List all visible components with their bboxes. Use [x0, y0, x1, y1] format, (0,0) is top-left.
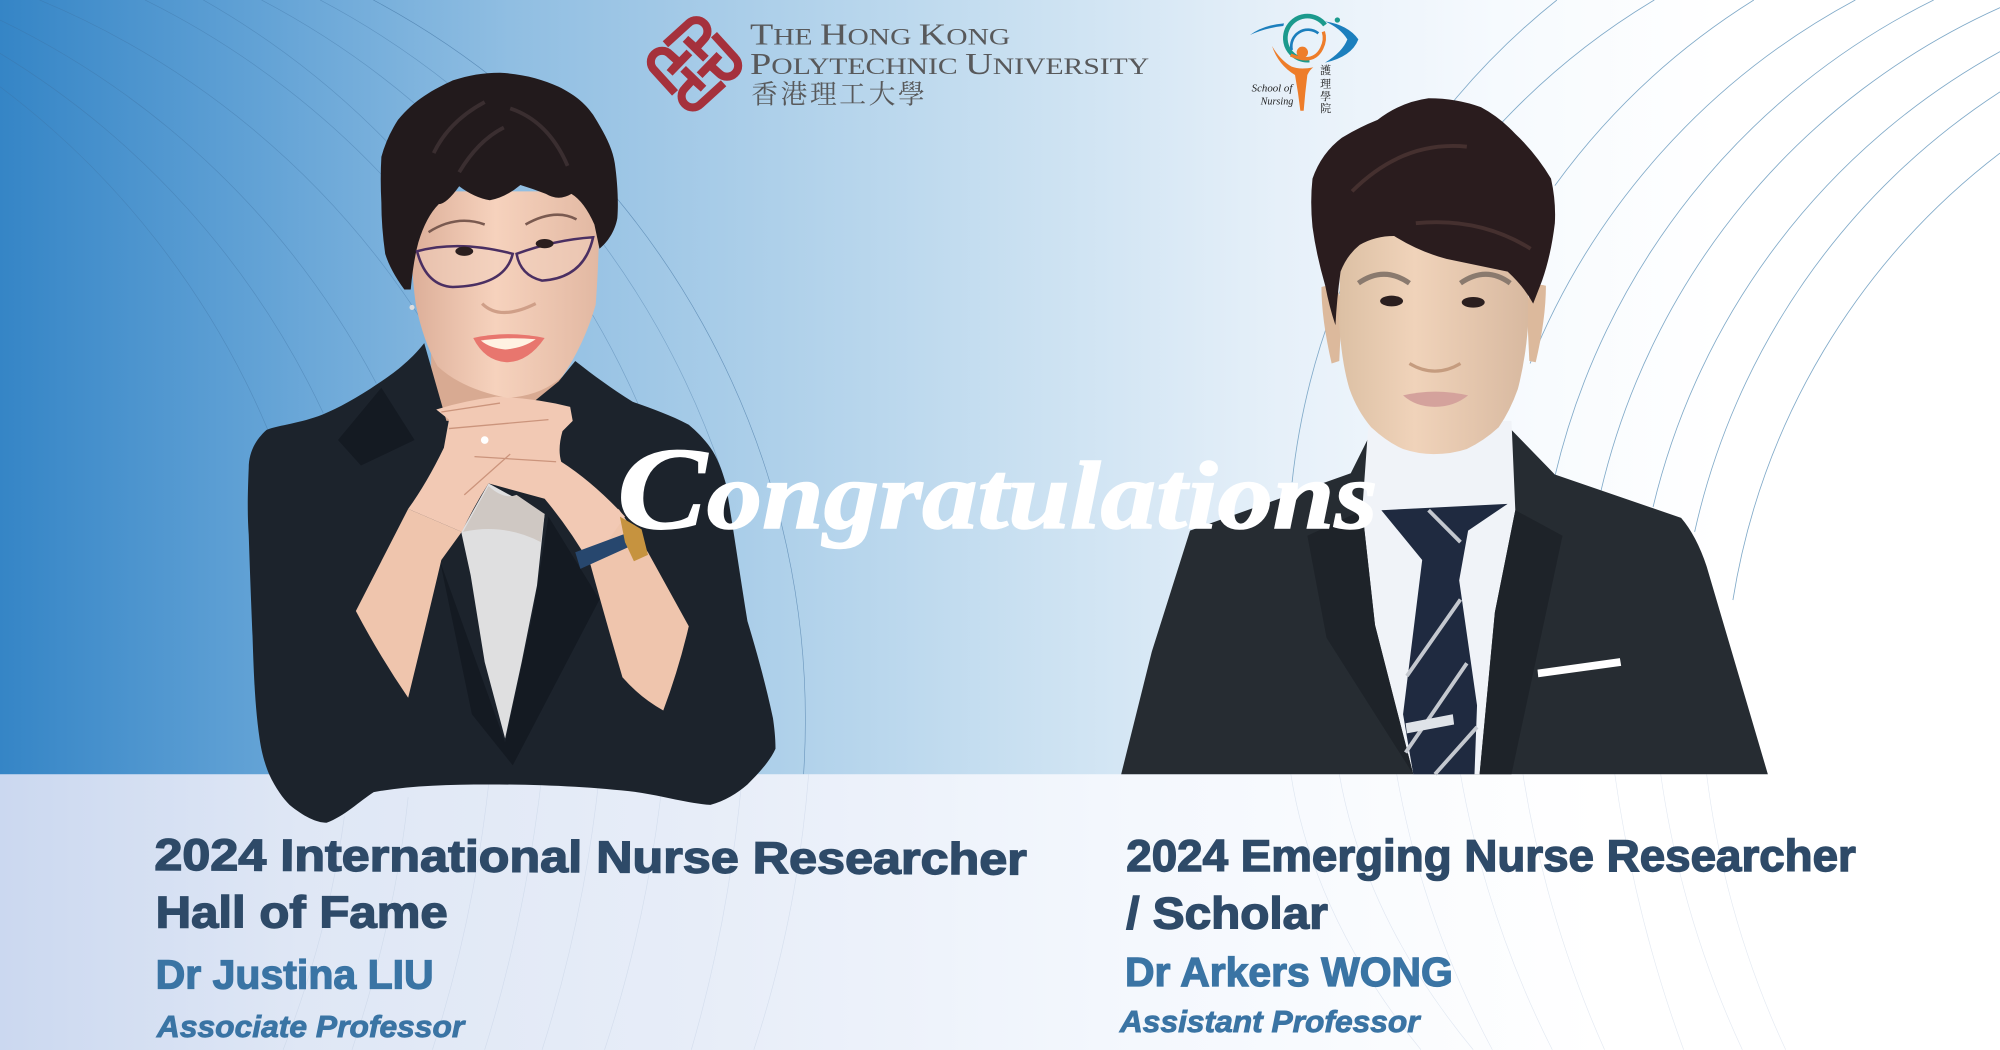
right concentric arcs	[1292, 0, 2000, 600]
logo text: Chinese name: 香港理工大學	[751, 79, 925, 109]
blouse	[461, 483, 545, 739]
logo text: English name: THE H ONG K ONG	[750, 18, 1010, 52]
hair highlights	[434, 102, 568, 172]
tie stripes	[1406, 510, 1477, 774]
brows	[429, 215, 577, 232]
glasses	[417, 237, 593, 287]
role: Assistant Professor	[1119, 1005, 1422, 1039]
hands	[408, 397, 625, 565]
icon: dot	[1335, 17, 1340, 23]
name: Dr Arkers WONG	[1125, 949, 1453, 995]
award block: Dr Arkers Wong	[1119, 832, 1856, 1039]
background gradient	[0, 0, 2000, 776]
logo: School of Nursing: 學	[1320, 90, 1331, 103]
mouth	[1403, 392, 1468, 407]
award block: Dr Justina Liu	[154, 831, 1027, 1044]
left forearm	[356, 509, 462, 698]
award title line 2: Hall of Fame	[156, 888, 448, 937]
nose shadow	[482, 304, 536, 312]
left concentric arcs	[0, 0, 805, 774]
shirt	[1362, 421, 1515, 774]
portrait: Dr Arkers Wong	[1121, 98, 1768, 774]
award title line 1: 2024 Emerging Nurse Researcher	[1126, 832, 1856, 881]
jacket	[248, 343, 776, 823]
logo: School of Nursing: 理	[1320, 77, 1331, 90]
tie	[1381, 504, 1508, 774]
hair	[381, 73, 618, 290]
icon: figure	[1272, 46, 1313, 111]
ring	[481, 436, 489, 444]
faint arc continuations in the bottom band	[283, 774, 1786, 1050]
portrait: Dr Justina Liu	[248, 73, 776, 823]
eyes	[1380, 296, 1485, 308]
eyes	[455, 239, 554, 256]
logo text: second line: POLYTECHNIC U NIVERSITY	[750, 47, 1149, 81]
name: Dr Justina LIU	[156, 952, 434, 998]
logo: School of Nursing: Nursing	[1260, 96, 1293, 107]
bottom panel band	[0, 774, 2000, 1050]
heading: Congratulations: Congratulations	[617, 424, 1378, 554]
teeth	[481, 338, 536, 349]
award title line 1: 2024 International Nurse Researcher	[154, 831, 1027, 884]
icon: swoosh	[1250, 21, 1358, 63]
role: Associate Professor	[156, 1010, 466, 1044]
face	[411, 191, 599, 398]
award title line 2: / Scholar	[1126, 890, 1328, 939]
nose	[1409, 364, 1460, 371]
watch	[575, 532, 634, 569]
earring	[409, 305, 415, 310]
hair	[1311, 98, 1555, 325]
ears	[1321, 285, 1546, 364]
face	[1339, 217, 1528, 454]
logo: The Hong Kong Polytechnic University	[651, 18, 1149, 109]
right forearm	[591, 509, 689, 710]
logo text: School of	[1252, 84, 1294, 95]
neck	[431, 344, 561, 427]
logo: School of Nursing: 護	[1320, 63, 1331, 77]
logo: School of Nursing	[1250, 16, 1358, 115]
jacket	[1121, 430, 1768, 774]
icon: rings	[1285, 16, 1325, 60]
brows	[1358, 274, 1510, 283]
jacket lapel shading	[338, 388, 599, 765]
lips	[473, 334, 545, 362]
pocket square	[1538, 658, 1621, 677]
lapel shading	[1307, 510, 1562, 774]
tie clip	[1406, 714, 1454, 733]
hair highlights	[1352, 146, 1531, 249]
logo: School of Nursing: 院	[1320, 101, 1331, 115]
icon: PolyU knot	[651, 20, 738, 107]
